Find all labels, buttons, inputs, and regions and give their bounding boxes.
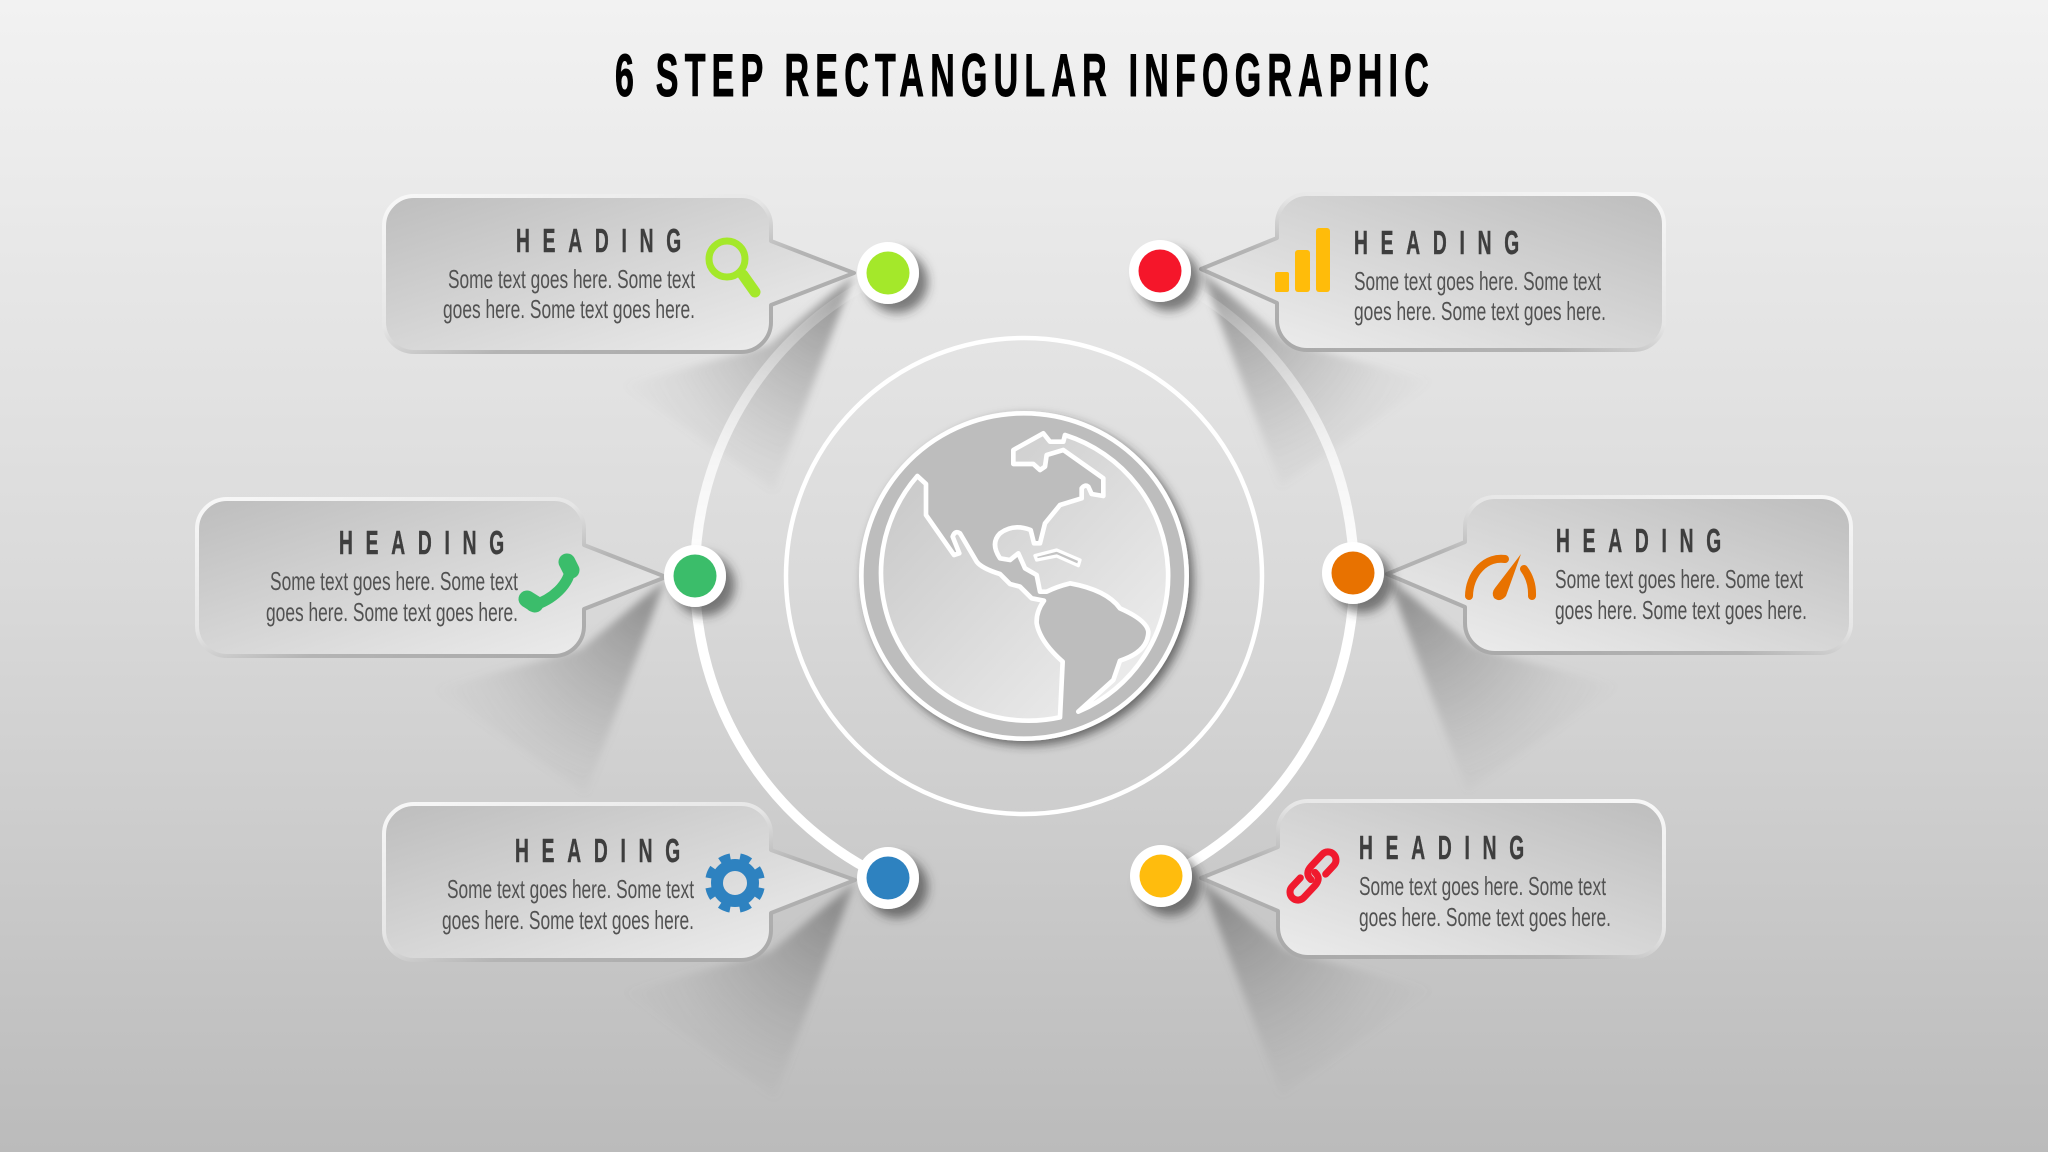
body text: Some text goes here. Some text xyxy=(1354,266,1602,296)
icon: chain link xyxy=(1287,849,1339,903)
title: 6 STEP RECTANGULAR INFOGRAPHIC xyxy=(615,42,1435,109)
globe xyxy=(861,413,1187,739)
callout: top left xyxy=(384,196,854,352)
heading: HEADING xyxy=(516,222,694,259)
callout: top left: goes here. Some text goes here. xyxy=(443,294,695,324)
icon: bar chart xyxy=(1275,228,1330,292)
body text: Some text goes here. Some text xyxy=(447,874,695,904)
body text: Some text goes here. Some text xyxy=(270,566,519,596)
node: orange xyxy=(1322,542,1384,604)
heading: HEADING xyxy=(515,832,693,869)
cuba island xyxy=(1035,550,1080,566)
callout: middle right xyxy=(1387,497,1851,653)
heading: HEADING xyxy=(1359,829,1537,866)
icon: gear xyxy=(704,852,766,914)
icon: magnifier xyxy=(709,241,755,292)
inner ring xyxy=(786,338,1262,814)
callout: bottom left xyxy=(384,804,855,960)
outer ring arcs xyxy=(695,273,1354,879)
node: blue xyxy=(857,847,919,909)
callout: top right: goes here. Some text goes here. xyxy=(1354,296,1606,326)
heading: HEADING xyxy=(339,524,517,561)
heading: HEADING xyxy=(1556,522,1734,559)
node: yellow xyxy=(1130,845,1192,907)
callout: bottom right: goes here. Some text goes here. xyxy=(1359,902,1611,932)
callout: middle right: goes here. Some text goes here. xyxy=(1555,595,1807,625)
node: red xyxy=(1129,240,1191,302)
heading: HEADING xyxy=(1354,224,1532,261)
icon: gauge xyxy=(1469,554,1532,600)
body text: Some text goes here. Some text xyxy=(1555,564,1804,594)
pacific ocean xyxy=(881,476,1063,721)
body text: Some text goes here. Some text xyxy=(1359,871,1607,901)
callout: bottom right xyxy=(1201,801,1664,957)
callout: bottom left: goes here. Some text goes here. xyxy=(442,905,694,935)
callout: middle left: goes here. Some text goes here. xyxy=(266,597,518,627)
node: green xyxy=(664,545,726,607)
long shadows behind callouts xyxy=(436,271,1617,1097)
icon: phone xyxy=(527,562,571,606)
node: lime xyxy=(857,242,919,304)
atlantic ocean xyxy=(995,433,1168,712)
callout: top right xyxy=(1201,194,1664,350)
callout: middle left xyxy=(197,499,666,656)
body text: Some text goes here. Some text xyxy=(448,264,696,294)
